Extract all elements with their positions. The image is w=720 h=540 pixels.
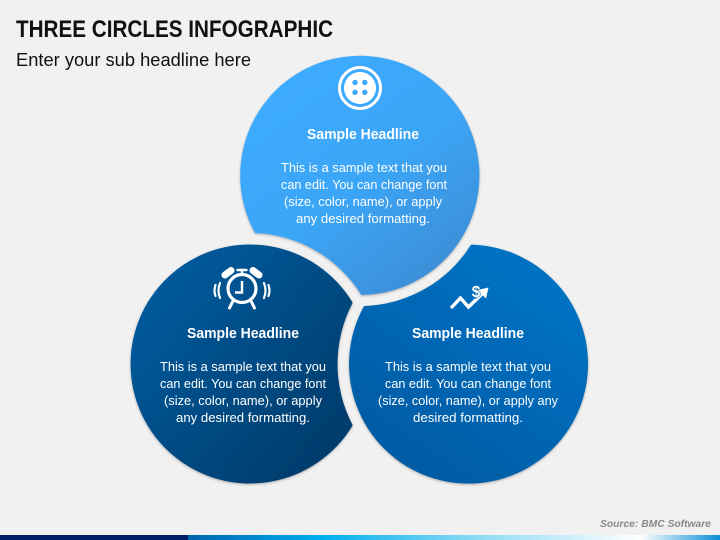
text block: top	[281, 161, 447, 226]
text block: left: (size, color, name), or apply	[164, 394, 323, 408]
panel: top circle	[240, 56, 479, 295]
text block: right: This is a sample text that you	[385, 360, 551, 374]
heading: left: Sample Headline	[187, 326, 299, 342]
text block: left	[160, 360, 326, 425]
icon: rising chart with dollar	[451, 284, 488, 308]
text block: right: can edit. You can change font	[385, 377, 551, 391]
source note: Source: BMC Software	[600, 518, 711, 530]
icon: button	[340, 68, 380, 108]
text block: left: can edit. You can change font	[160, 377, 326, 391]
bottom bar	[0, 535, 720, 540]
text block: right	[378, 360, 559, 425]
text block: top: can edit. You can change font	[281, 178, 447, 192]
icon: rising chart with dollar: $	[472, 284, 481, 301]
icon: alarm clock	[214, 270, 270, 308]
text block: top: any desired formatting.	[296, 212, 430, 226]
text block: right: (size, color, name), or apply any	[378, 394, 559, 408]
text block: top: This is a sample text that you	[281, 161, 447, 175]
text block: right: desired formatting.	[413, 411, 523, 425]
text block: left: This is a sample text that you	[160, 360, 326, 374]
panel: left circle	[131, 245, 353, 483]
heading: top: Sample Headline	[307, 127, 419, 143]
heading: right: Sample Headline	[412, 326, 524, 342]
title: THREE CIRCLES INFOGRAPHIC	[16, 16, 333, 43]
panel: right circle	[349, 245, 588, 484]
text block: left: any desired formatting.	[176, 411, 310, 425]
subtitle: Enter your sub headline here	[16, 49, 251, 70]
text block: top: (size, color, name), or apply	[284, 195, 443, 209]
